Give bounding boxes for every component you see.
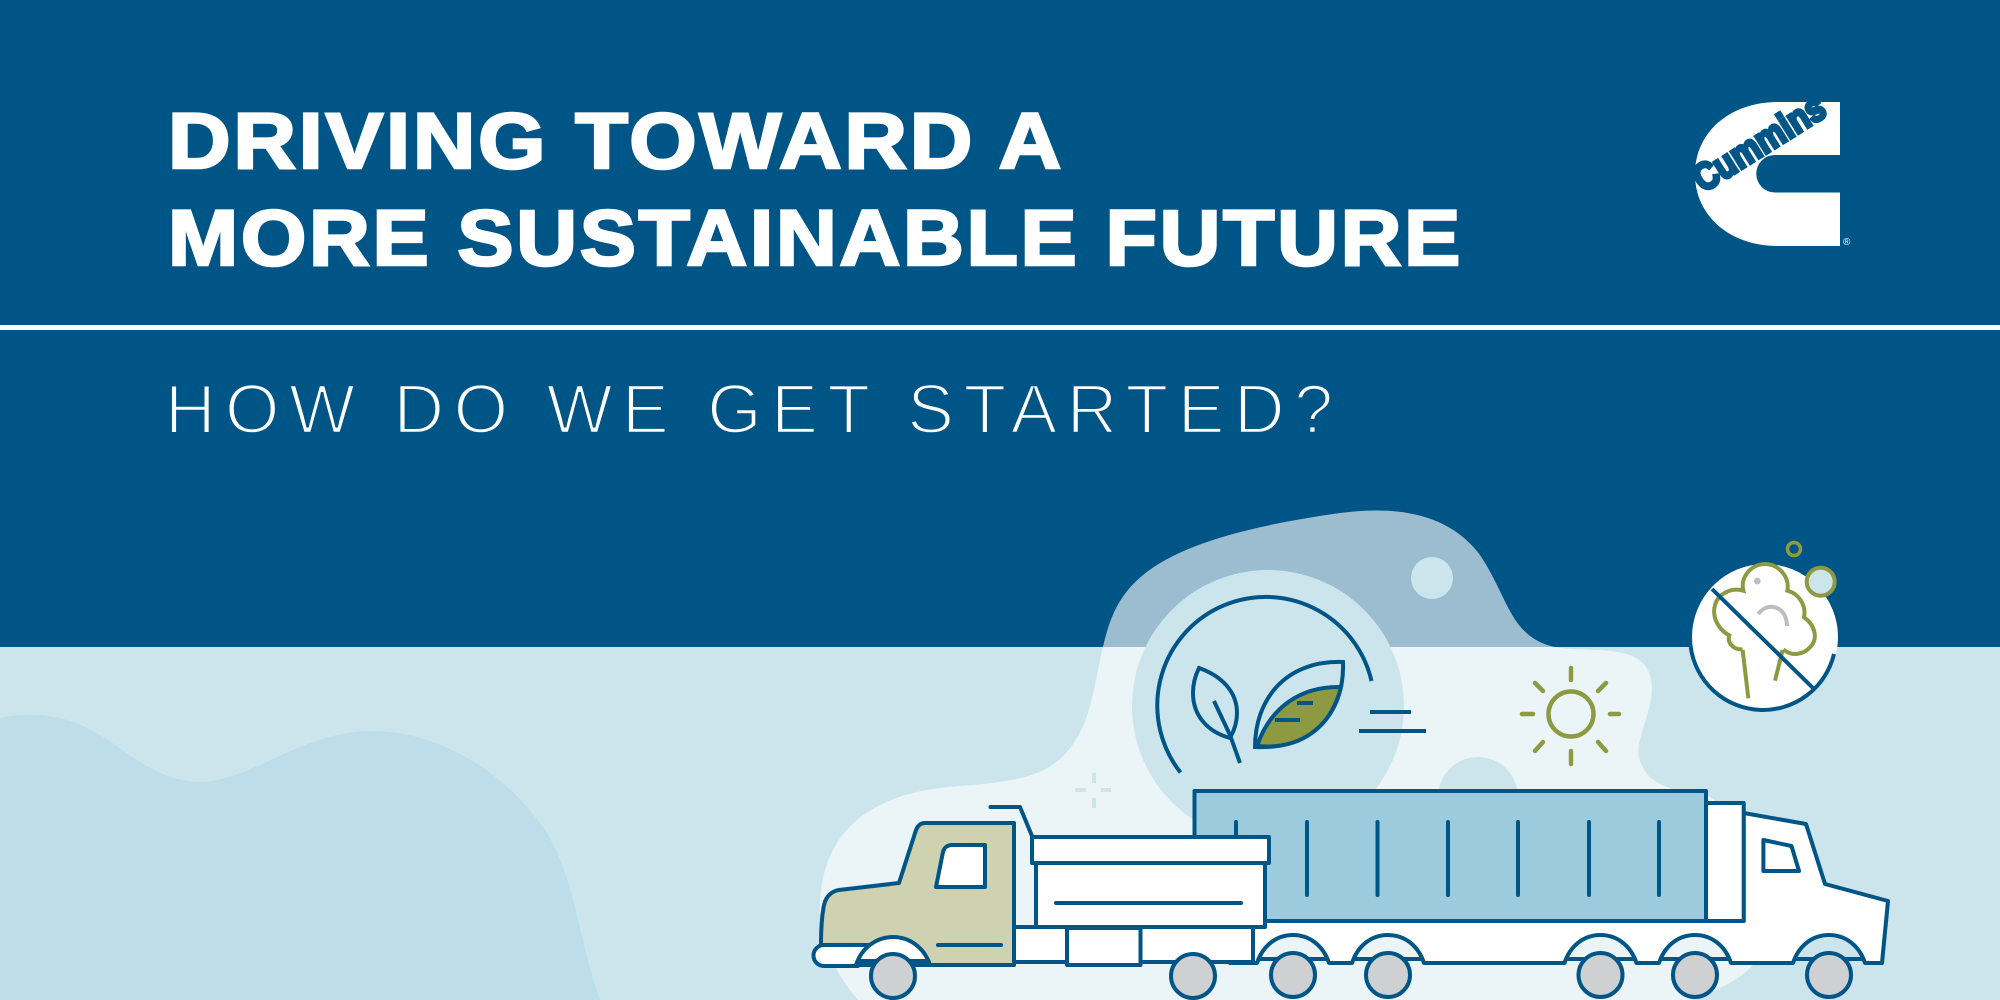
white disc	[1692, 564, 1838, 710]
exhaust pipe	[990, 807, 1032, 836]
white divider under title	[0, 325, 2000, 330]
bubbles	[1788, 542, 1800, 556]
decorative circle: behind trailer	[1438, 757, 1518, 837]
wheel	[871, 954, 915, 998]
wheel	[1578, 953, 1622, 997]
background: dark blue header band	[0, 0, 2000, 647]
trailer ribs	[1236, 822, 1659, 895]
dump body line	[1056, 901, 1241, 905]
background blob: centre	[820, 510, 1766, 1000]
icon: sparkle	[1075, 773, 1111, 808]
wheel	[1171, 954, 1215, 998]
small leaf stem	[1214, 701, 1240, 763]
wheel	[1271, 953, 1315, 997]
trailer	[1194, 791, 1706, 921]
icon: crossed-out tree	[1691, 542, 1838, 710]
wheel	[1807, 953, 1851, 997]
icon: Cummins logo: ®	[1843, 237, 1851, 248]
chassis	[1014, 927, 1253, 962]
cab window	[1763, 840, 1799, 871]
illustration: long truck facing right	[1194, 791, 1888, 997]
leaf ring arc	[1157, 597, 1372, 772]
wheel arch	[856, 937, 930, 965]
prohibition slash and arc	[1691, 589, 1834, 710]
illustration: dump truck facing left	[814, 807, 1269, 998]
front bumper	[814, 945, 872, 966]
icon: Cummins logo	[1686, 87, 1851, 248]
wheel arch chords	[1259, 957, 1863, 961]
dump body rim	[1032, 837, 1269, 863]
title: DRIVING TOWARD A	[168, 96, 1064, 185]
tool box	[1067, 928, 1140, 965]
cab	[821, 823, 1014, 965]
cab window	[936, 845, 985, 887]
dump body lower	[1036, 863, 1265, 927]
subtitle: HOW DO WE GET STARTED?	[165, 370, 1333, 448]
decorative circle: small top	[1411, 557, 1453, 599]
icon: Cummins logo: Cummins	[1686, 87, 1833, 201]
large leaf green part	[1257, 687, 1341, 746]
icon: sun	[1522, 668, 1619, 764]
arch chord	[858, 959, 928, 963]
icon: leaves	[1157, 597, 1426, 772]
title	[168, 96, 1463, 282]
decorative circle: large behind leaves	[1132, 570, 1404, 842]
wheel	[1366, 953, 1410, 997]
leaf dashes	[1275, 703, 1426, 731]
cab rear panel	[1706, 803, 1744, 921]
door handle line	[938, 943, 1001, 947]
large leaf	[1255, 662, 1343, 747]
small leaf	[1193, 668, 1237, 738]
wheel	[1673, 953, 1717, 997]
title: MORE SUSTAINABLE FUTURE	[168, 193, 1463, 282]
background blob: left	[0, 715, 600, 1000]
rear truck chassis and cab	[1230, 813, 1888, 963]
tree outline	[1714, 564, 1815, 698]
